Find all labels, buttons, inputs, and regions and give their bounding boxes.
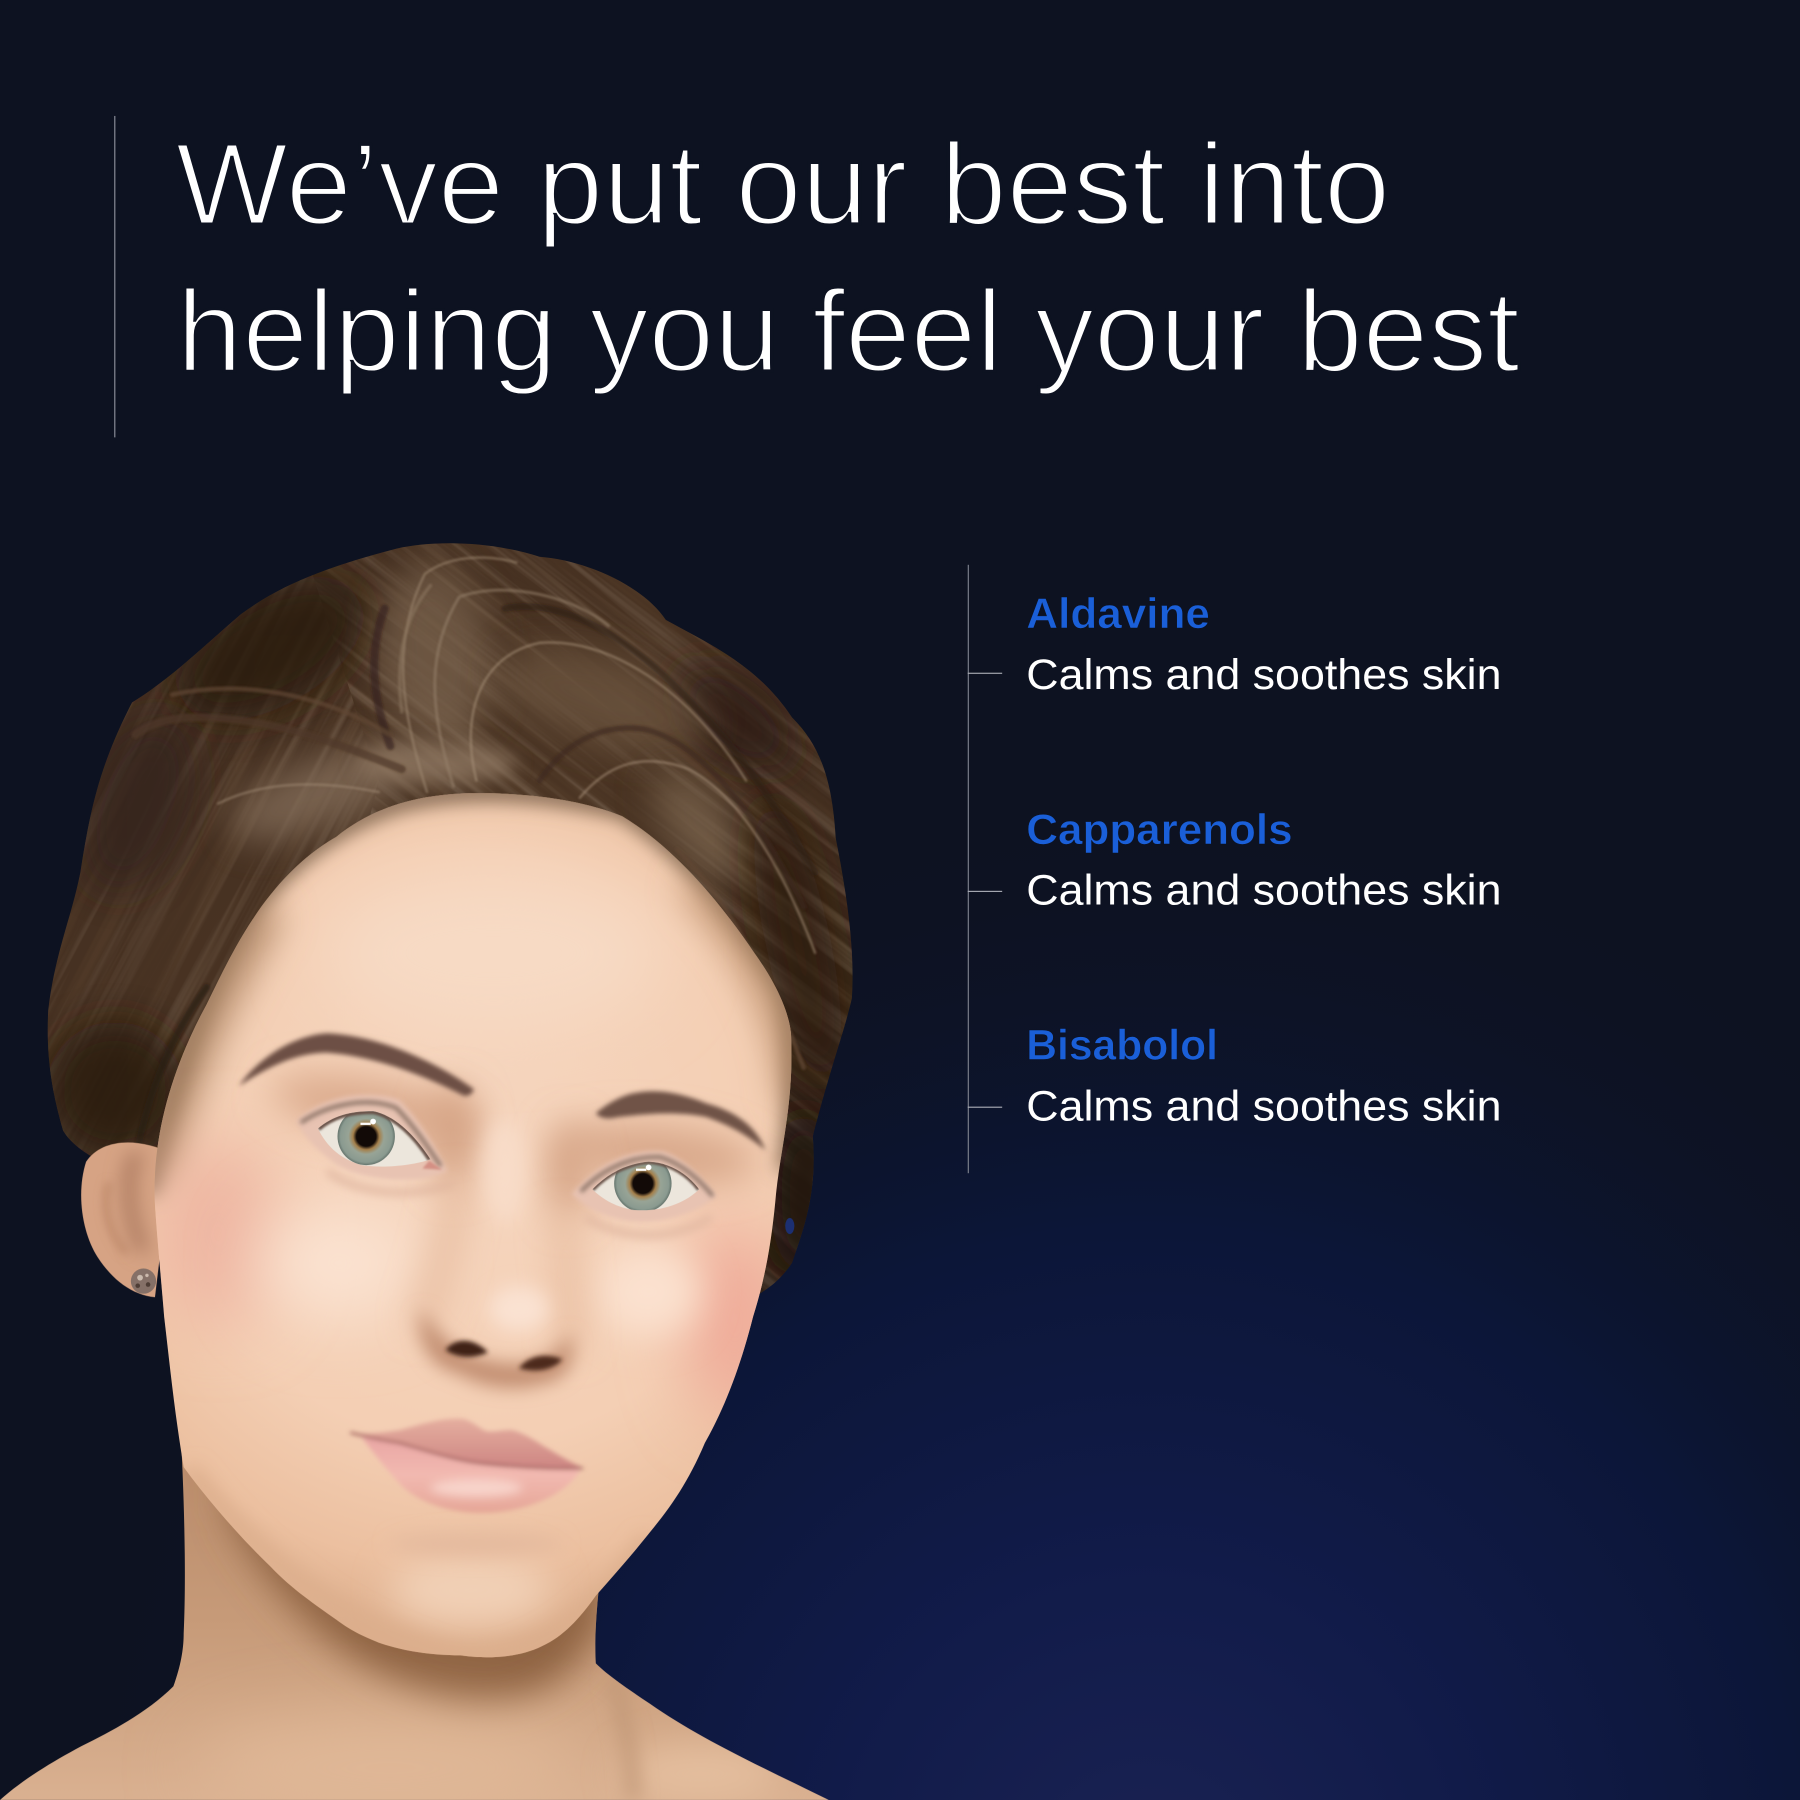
ear — [81, 1142, 172, 1297]
neck and shoulders — [0, 1446, 829, 1800]
ingredient: Capparenols: Calms and soothes skin — [1026, 867, 1502, 914]
hair strand texture: left sweep — [48, 578, 370, 1136]
soft tonal areas — [166, 567, 373, 736]
ingredient: Bisabolol — [968, 1022, 1502, 1129]
earring — [131, 1268, 156, 1294]
ingredient: Capparenols: Capparenols — [1026, 806, 1293, 853]
nose — [420, 1182, 459, 1327]
left eyebrow — [239, 1033, 474, 1096]
face — [149, 792, 796, 1659]
ingredient: Bisabolol: Calms and soothes skin — [1026, 1082, 1502, 1129]
title rule — [114, 116, 115, 437]
right eyebrow — [596, 1091, 766, 1150]
ingredient: Aldavine — [968, 590, 1502, 698]
left eye — [296, 1095, 448, 1180]
ingredient: Aldavine: Aldavine — [1026, 590, 1210, 637]
portrait of woman — [0, 543, 852, 1800]
strands rising from the parting — [403, 558, 517, 792]
ingredient list — [968, 565, 1502, 1173]
chin and jaw shading — [390, 1553, 551, 1627]
nose wings and underside — [420, 1309, 572, 1387]
ingredient: Bisabolol: Bisabolol — [1026, 1022, 1218, 1069]
ingredient: Aldavine: Calms and soothes skin — [1026, 651, 1502, 698]
title line 2: helping you feel your best — [177, 266, 1520, 396]
eye sockets — [266, 1058, 464, 1144]
list spine — [968, 565, 969, 1173]
ingredient: Capparenols — [968, 806, 1502, 914]
strands sweeping left — [135, 717, 402, 769]
cheek highlight — [258, 1205, 419, 1320]
title line 1: We’ve put our best into — [176, 119, 1390, 249]
nostrils — [445, 1341, 488, 1357]
hair strand texture: right sweep — [326, 543, 852, 1294]
gap in hair showing background — [785, 1218, 794, 1234]
lips — [350, 1419, 583, 1513]
forehead highlight — [342, 875, 650, 1011]
right eye — [572, 1151, 716, 1222]
soft hairline — [149, 792, 794, 1194]
hair — [48, 543, 852, 1294]
cheek blush — [155, 1142, 281, 1326]
title block — [114, 116, 1520, 437]
